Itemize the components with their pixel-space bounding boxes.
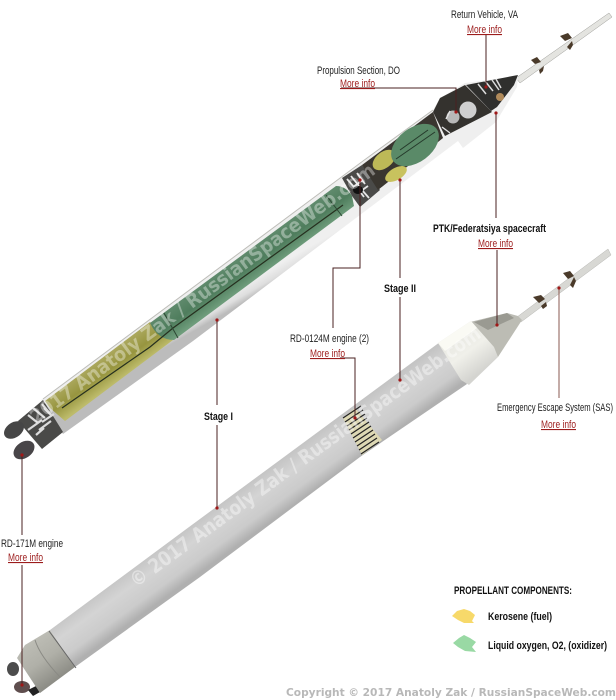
label: RD-171M engine: RD-171M engine (1, 538, 63, 550)
icon: oxygen swatch (453, 635, 476, 652)
label: Return Vehicle: More info (467, 24, 502, 36)
label: Stage II: Stage II (384, 283, 416, 295)
label: Emergency Escape System: More info (541, 419, 576, 431)
label: PTK spacecraft: PTK/Federatsiya spacecraft (433, 223, 546, 235)
escape tower, upper (516, 13, 612, 83)
icon: kerosene swatch (452, 609, 475, 623)
label: RD-171M engine (1, 538, 63, 564)
label: Propulsion Section: More info (340, 78, 375, 90)
label: Propulsion Section: Propulsion Section, DO (317, 65, 400, 77)
legend title: PROPELLANT COMPONENTS: (454, 585, 572, 597)
label: RD-0124M engine: RD-0124M engine (2) (290, 333, 369, 345)
escape tower, lower (517, 249, 611, 322)
label: Return Vehicle (451, 9, 518, 36)
tank centre line (62, 205, 343, 408)
watermark on uncut rocket: © 2017 Anatoly Zak / RussianSpaceWeb.com (125, 321, 485, 592)
label: Emergency Escape System (497, 402, 613, 431)
rocket body (50, 342, 467, 667)
cutaway rocket (1, 13, 612, 463)
label: Return Vehicle: Return Vehicle, VA (451, 9, 518, 21)
label: RD-171M engine: More info (8, 552, 43, 564)
stage II tanks (362, 112, 447, 190)
engine nozzles (7, 662, 40, 696)
oxidizer tank: stage I oxygen (150, 186, 354, 340)
rocket outer body (41, 76, 518, 434)
fairing (438, 321, 498, 385)
label: Stage I: Stage I (204, 411, 233, 423)
uncut rocket (7, 249, 611, 696)
label: RD-0124M engine (290, 333, 369, 360)
return vehicle (466, 75, 518, 111)
interstage truss (343, 406, 382, 455)
watermark on cutaway rocket: 2017 Anatoly Zak / RussianSpaceWeb.com (26, 159, 379, 428)
stage I engines (1, 400, 63, 463)
label: PTK spacecraft: More info (478, 238, 513, 250)
label: PTK spacecraft (433, 223, 546, 250)
kerosene label: Kerosene (fuel) (488, 611, 552, 623)
label: RD-0124M engine: More info (310, 348, 345, 360)
fuel tank: stage I kerosene (45, 322, 173, 421)
legend (452, 585, 607, 652)
first stage skirt (17, 630, 75, 693)
upper thin edge (43, 110, 433, 399)
spacecraft cone (470, 313, 522, 357)
propulsion section (433, 85, 492, 136)
stage II engine bay (342, 165, 380, 207)
label: Propulsion Section (317, 65, 400, 90)
leader end dots (20, 85, 561, 687)
